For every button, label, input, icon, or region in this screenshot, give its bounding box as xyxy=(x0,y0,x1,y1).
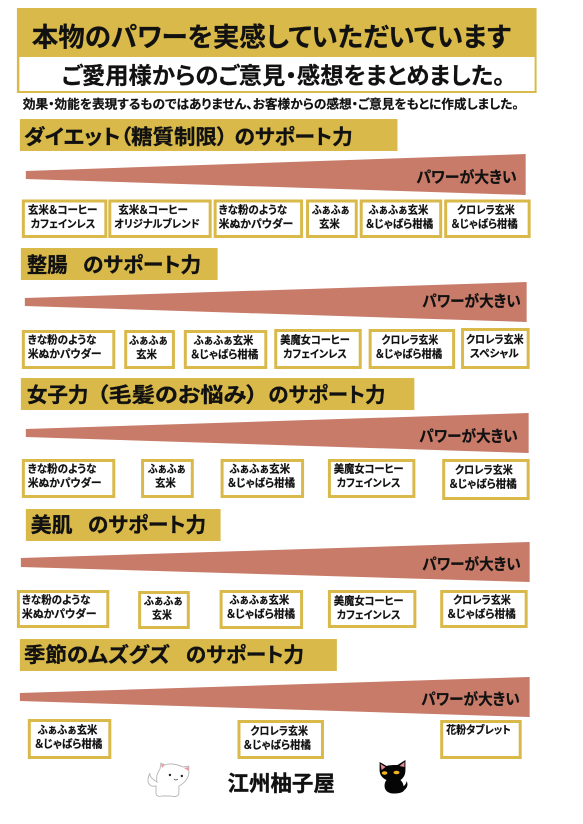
product box: ふぁふぁ玄米 xyxy=(37,723,98,737)
product box: カフェインレス xyxy=(283,348,347,361)
product box xyxy=(329,460,414,496)
product box: 玄米 xyxy=(152,608,172,622)
product box: ＆じゃばら柑橘 xyxy=(35,737,103,751)
product box: ふぁふぁ xyxy=(312,204,350,217)
product box: ＆じゃばら柑橘 xyxy=(447,607,516,621)
product box: ふぁふぁ玄米 xyxy=(229,462,291,476)
product box: オリジナルブレンド xyxy=(114,217,200,231)
product box: 玄米 xyxy=(155,476,176,490)
heading: seasonal: のサポート力 xyxy=(186,644,304,667)
product box xyxy=(370,330,454,368)
product box: ＆じゃばら柑橘 xyxy=(376,347,443,361)
product box xyxy=(361,201,441,236)
heading: hair xyxy=(21,378,414,410)
power wedge xyxy=(25,282,527,322)
product box xyxy=(444,460,528,498)
product box: ＆じゃばら柑橘 xyxy=(451,217,518,231)
product box xyxy=(29,720,110,758)
product box: ふぁふぁ xyxy=(129,335,168,347)
power wedge: パワーが大きい xyxy=(422,291,521,311)
product box xyxy=(239,722,322,758)
icon: white cat xyxy=(148,763,189,797)
product box: ふぁふぁ玄米 xyxy=(229,593,290,607)
product box xyxy=(126,332,173,368)
product box xyxy=(442,722,520,758)
heading: diet: のサポート力 xyxy=(235,126,353,149)
product box: ＆じゃばら柑橘 xyxy=(243,738,311,752)
product box: 米ぬかパウダー xyxy=(22,607,96,621)
product box: ふぁふぁ玄米 xyxy=(194,334,254,347)
panel: women's hair support xyxy=(21,378,529,498)
heading: skin: のサポート力 xyxy=(88,514,206,537)
panel: skin support xyxy=(18,509,530,628)
disclaimer note: 効果・効能を表現するものではありません、お客様からの感想・ご意見をもとに作成しました。 xyxy=(23,96,519,112)
product box xyxy=(276,330,360,368)
power wedge xyxy=(21,542,530,582)
product box xyxy=(23,201,106,236)
power wedge: パワーが大きい xyxy=(421,689,520,709)
product box: ふぁふぁ玄米 xyxy=(368,203,429,217)
product box xyxy=(23,460,114,496)
product box: ふぁふぁ xyxy=(148,463,186,476)
product box: カフェインレス xyxy=(336,477,400,490)
power wedge: パワーが大きい xyxy=(416,167,517,187)
title banner xyxy=(17,8,537,93)
product box: 玄米 xyxy=(319,217,340,231)
product box xyxy=(23,332,114,368)
product box: スペシャル xyxy=(470,348,519,360)
product box: 米ぬかパウダー xyxy=(28,347,101,361)
product box xyxy=(215,201,302,236)
product box: カフェインレス xyxy=(336,609,400,622)
heading: gut: のサポート力 xyxy=(83,254,201,277)
product box: ＆じゃばら柑橘 xyxy=(191,348,259,361)
power wedge: パワーが大きい xyxy=(422,554,521,574)
main title: 本物のパワーを実感していただいています xyxy=(32,22,511,53)
product box: クロレラ玄米 xyxy=(453,593,511,607)
power wedge xyxy=(26,413,529,453)
product box xyxy=(18,592,108,626)
product box xyxy=(442,592,526,626)
icon: black cat xyxy=(380,760,407,794)
product box xyxy=(221,592,302,628)
heading: seasonal: 季節のムズグズ xyxy=(24,643,170,667)
product box: 玄米＆コーヒー xyxy=(118,203,188,217)
product box xyxy=(329,592,415,626)
product box: 玄米＆コーヒー xyxy=(28,203,97,217)
product box xyxy=(222,460,303,496)
product box: 米ぬかパウダー xyxy=(219,217,293,231)
product box: ＆じゃばら柑橘 xyxy=(228,476,296,490)
heading: gut: 整腸 xyxy=(27,254,68,277)
product box: クロレラ玄米 xyxy=(381,333,439,347)
heading: diet: ダイエット（糖質制限） xyxy=(24,125,228,149)
heading: skin: 美肌 xyxy=(31,514,73,537)
product box: クロレラ玄米 xyxy=(250,724,308,738)
product box: ＆じゃばら柑橘 xyxy=(366,217,434,231)
panel: diet support xyxy=(20,119,529,236)
product box: ＆じゃばら柑橘 xyxy=(227,607,296,621)
power wedge: パワーが大きい xyxy=(419,426,518,446)
product box: 米ぬかパウダー xyxy=(28,476,101,490)
product box: カフェインレス xyxy=(30,218,95,231)
heading: hair: 女子力 xyxy=(27,384,88,407)
heading: skin xyxy=(26,509,221,541)
product box xyxy=(308,201,356,236)
heading: gut xyxy=(21,248,218,280)
product box: きな粉のような xyxy=(28,462,96,476)
product box: 花粉タブレット xyxy=(446,723,511,737)
subtitle: ご愛用様からのご意見・感想をまとめました。 xyxy=(62,62,505,89)
product box: 美魔女コーヒー xyxy=(334,594,403,608)
product box: きな粉のような xyxy=(22,593,90,607)
product box: クロレラ玄米 xyxy=(455,463,513,477)
product box xyxy=(185,332,266,368)
heading: hair: （毛髪のお悩み） xyxy=(97,384,258,407)
panel: seasonal allergy support xyxy=(20,639,530,758)
power wedge xyxy=(20,677,530,717)
product box: 美魔女コーヒー xyxy=(334,462,403,476)
product box: ＆じゃばら柑橘 xyxy=(449,477,517,491)
product box: ふぁふぁ xyxy=(144,595,183,608)
product box: きな粉のような xyxy=(219,203,287,217)
heading: hair: のサポート力 xyxy=(268,384,386,407)
product box: クロレラ玄米 xyxy=(457,203,515,217)
product box xyxy=(446,201,529,236)
heading: diet xyxy=(20,119,397,151)
product box: クロレラ玄米 xyxy=(466,333,524,346)
product box: 美魔女コーヒー xyxy=(280,333,350,347)
product box xyxy=(463,330,528,368)
product box xyxy=(143,460,192,496)
brand name: 江州柚子屋 xyxy=(228,772,335,796)
product box: きな粉のような xyxy=(28,333,96,347)
product box xyxy=(110,201,210,236)
power wedge xyxy=(26,154,526,195)
heading: seasonal xyxy=(20,639,337,671)
product box xyxy=(140,592,188,628)
panel: gut support xyxy=(21,248,528,368)
product box: 玄米 xyxy=(136,348,157,361)
